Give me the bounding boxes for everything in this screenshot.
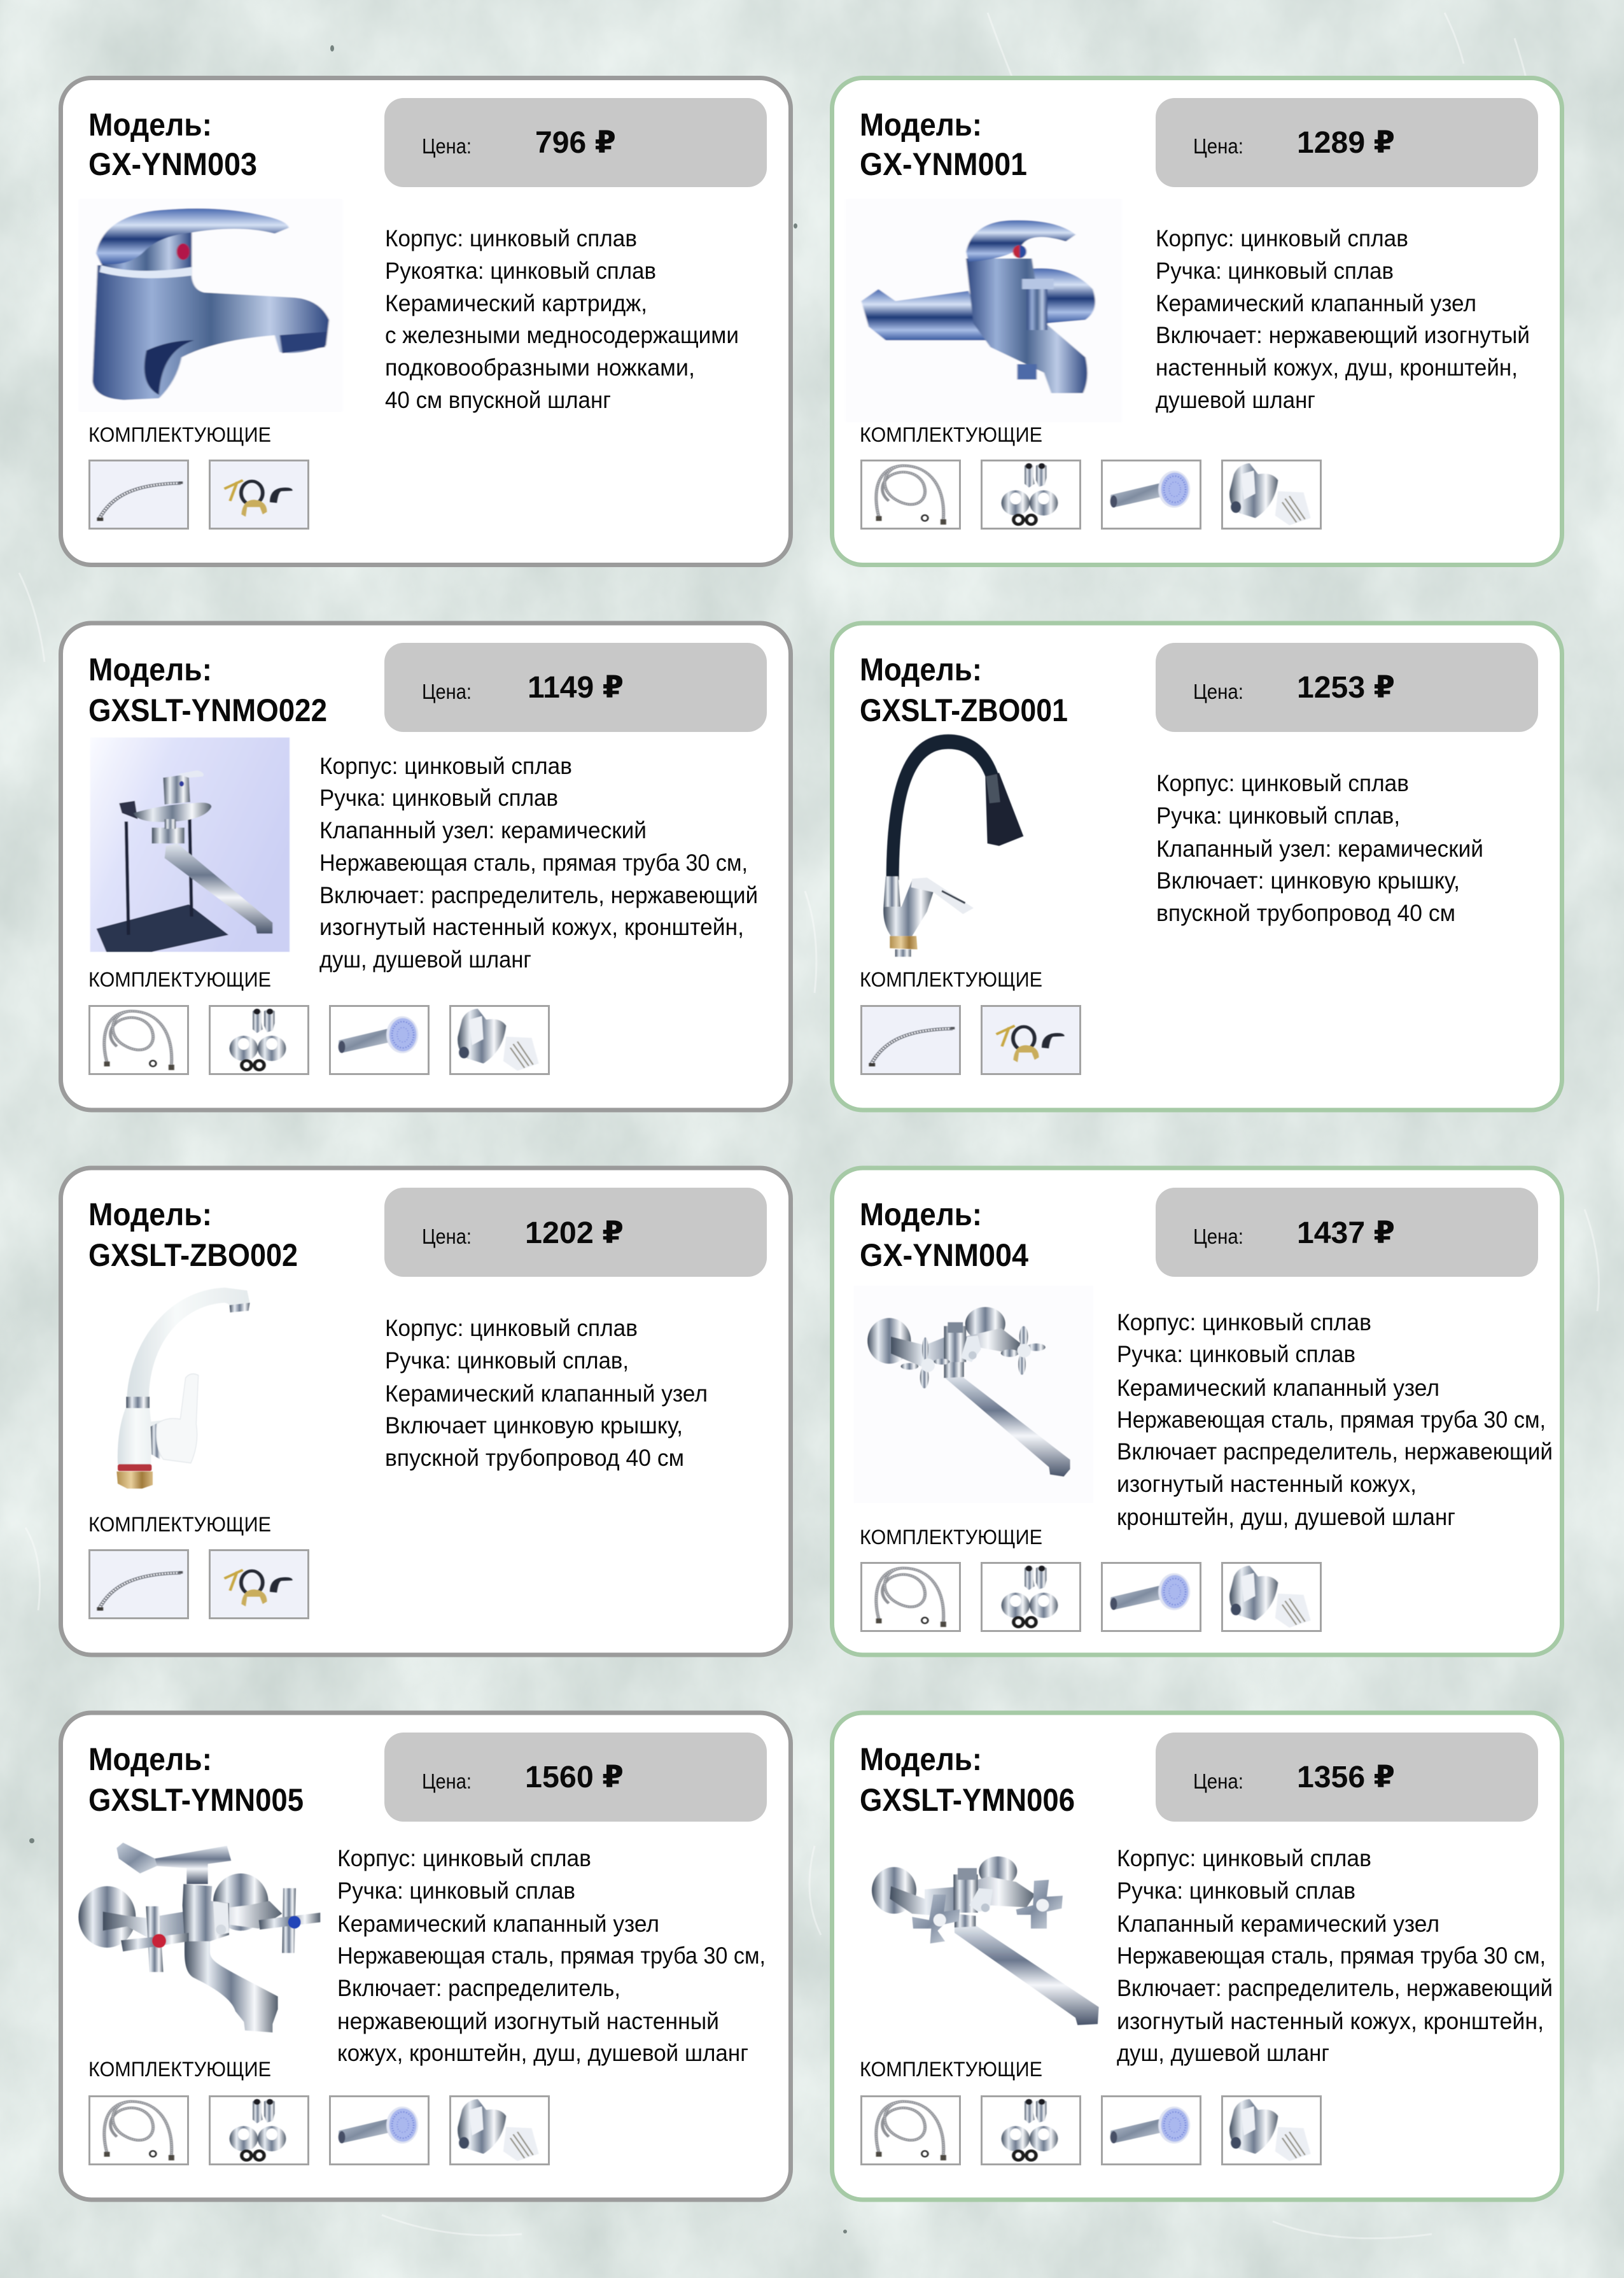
accessories heading: КОМПЛЕКТУЮЩИЕ [860, 423, 1042, 446]
price box: Цена: [1193, 1225, 1243, 1248]
spec text: Корпус: цинковый сплав [385, 1315, 638, 1341]
model title [860, 1741, 1075, 1818]
price box: 1202 ₽ [525, 1216, 624, 1250]
spec text: Корпус: цинковый сплав [1117, 1845, 1371, 1871]
spec text: изогнутый настенный кожух, кронштейн, [1117, 2008, 1544, 2034]
spec text: Ручка: цинковый сплав, [1156, 803, 1400, 829]
card: GXSLT-YNMO022 [61, 623, 790, 1110]
accessory: wall holder [451, 2097, 549, 2164]
model title [860, 1197, 1028, 1273]
spec text [385, 225, 739, 413]
accessory: flexible hose [89, 1550, 188, 1618]
model title: Модель: [88, 652, 212, 687]
price box [1156, 1733, 1538, 1822]
spec text: душевой шланг [1156, 387, 1315, 413]
model title: GXSLT-YNMO022 [88, 693, 327, 728]
price box: 1560 ₽ [525, 1761, 624, 1794]
model title: Модель: [860, 652, 982, 687]
price box: Цена: [1193, 134, 1243, 158]
price box [1156, 98, 1538, 187]
spec text: Керамический клапанный узел [385, 1381, 708, 1407]
model title [88, 1741, 304, 1818]
accessory: mounting parts [981, 1006, 1081, 1074]
spec text [337, 1845, 766, 2066]
spec text: Корпус: цинковый сплав [385, 225, 637, 251]
accessory: shower hose [862, 461, 960, 528]
spec text: кронштейн, душ, душевой шланг [1117, 1504, 1455, 1530]
accessory: shower head [1102, 1563, 1200, 1631]
model title: GXSLT-ZBO001 [860, 693, 1068, 728]
accessory: mounting parts [210, 1550, 308, 1618]
price box: 1149 ₽ [528, 671, 624, 705]
price box: Цена: [1193, 1769, 1243, 1793]
price box: Цена: [422, 134, 472, 158]
accessories heading: КОМПЛЕКТУЮЩИЕ [88, 2058, 271, 2081]
accessory: flexible hose [862, 1006, 960, 1074]
model title: Модель: [88, 107, 212, 143]
spec text: Нержавеющая сталь, прямая труба 30 см, [1117, 1943, 1546, 1969]
price box [384, 643, 767, 732]
spec text: Керамический клапанный узел [1156, 290, 1476, 316]
card: GX-YNM004 [832, 1168, 1562, 1655]
model title: GXSLT-YMN006 [860, 1782, 1075, 1818]
spec text: Ручка: цинковый сплав [1117, 1341, 1355, 1367]
accessories heading: КОМПЛЕКТУЮЩИЕ [860, 1526, 1042, 1549]
product image: black gooseneck faucet [883, 742, 1023, 957]
spec text [1156, 225, 1530, 413]
accessory: shower head [330, 2097, 429, 2164]
accessory: fittings [210, 1006, 308, 1074]
spec text: Ручка: цинковый сплав [319, 785, 558, 811]
model title: Модель: [860, 1741, 982, 1777]
accessory: wall holder [451, 1006, 549, 1074]
price box: 796 ₽ [535, 126, 616, 160]
accessories heading: КОМПЛЕКТУЮЩИЕ [88, 423, 271, 446]
spec text: кожух, кронштейн, душ, душевой шланг [337, 2040, 748, 2066]
spec text: нержавеющий изогнутый настенный [337, 2008, 719, 2034]
spec text: Нержавеющая сталь, прямая труба 30 см, [319, 850, 748, 876]
spec text [1117, 1845, 1553, 2066]
model title: Модель: [88, 1197, 212, 1232]
product image: basin faucet [78, 199, 342, 412]
card frame [61, 1713, 790, 2200]
card frame [832, 623, 1562, 1110]
spec text: Включает: распределитель, нержавеющий [319, 882, 758, 908]
spec text: Корпус: цинковый сплав [1156, 770, 1409, 796]
spec text: впускной трубопровод 40 см [1156, 900, 1455, 926]
accessory: mounting parts [210, 461, 308, 528]
model title [860, 652, 1068, 728]
price box: 1289 ₽ [1297, 126, 1395, 160]
model title: GX-YNM003 [88, 146, 257, 182]
price box: Цена: [422, 680, 472, 703]
spec text: Корпус: цинковый сплав [1117, 1309, 1371, 1335]
accessory: wall holder [1222, 2097, 1321, 2164]
spec text [1117, 1309, 1553, 1530]
card frame [832, 78, 1562, 565]
spec text: Включает цинковую крышку, [385, 1412, 683, 1438]
spec text: впускной трубопровод 40 см [385, 1445, 684, 1471]
spec text: Ручка: цинковый сплав, [385, 1347, 629, 1374]
spec text: Ручка: цинковый сплав [337, 1878, 575, 1904]
spec text [1156, 770, 1483, 926]
card: GX-YNM003 [61, 78, 790, 565]
card frame [61, 1168, 790, 1655]
spec text: настенный кожух, душ, кронштейн, [1156, 355, 1518, 381]
spec text: Нержавеющая сталь, прямая труба 30 см, [337, 1943, 766, 1969]
price box: Цена: [422, 1225, 472, 1248]
spec text [319, 753, 758, 973]
accessory: shower hose [89, 2097, 188, 2164]
model title: Модель: [860, 1197, 982, 1232]
model title: GXSLT-YMN005 [88, 1782, 304, 1818]
card frame [61, 623, 790, 1110]
card: GXSLT-ZBO001 [832, 623, 1562, 1110]
model title [88, 1197, 298, 1273]
accessory: flexible hose [89, 461, 188, 528]
spec text: Включает: распределитель, [337, 1975, 620, 2001]
price box: 1437 ₽ [1297, 1216, 1395, 1250]
accessory: wall holder [1222, 1563, 1321, 1631]
spec text: Керамический клапанный узел [1117, 1375, 1439, 1401]
model title [88, 107, 257, 182]
spec text: 40 см впускной шланг [385, 387, 611, 413]
accessories heading: КОМПЛЕКТУЮЩИЕ [88, 968, 271, 991]
card: GXSLT-YMN006 [832, 1713, 1562, 2200]
spec text [385, 1315, 708, 1471]
spec text: Ручка: цинковый сплав [1117, 1878, 1355, 1904]
product image: twin cross-handle mixer [854, 1286, 1093, 1503]
accessories heading: КОМПЛЕКТУЮЩИЕ [860, 968, 1042, 991]
model title: Модель: [860, 107, 982, 143]
spec text: Корпус: цинковый сплав [319, 753, 572, 779]
product image: long spout twin handle mixer [872, 1857, 1099, 2025]
price box: Цена: [422, 1769, 472, 1793]
model title [860, 107, 1027, 182]
accessory: fittings [981, 2097, 1081, 2164]
model title: GX-YNM004 [860, 1237, 1028, 1273]
accessory: wall holder [1222, 461, 1321, 528]
price box: 1253 ₽ [1297, 671, 1395, 705]
spec text: изогнутый настенный кожух, кронштейн, [319, 914, 744, 940]
spec text: с железными медносодержащими [385, 322, 739, 348]
price box [384, 1188, 767, 1277]
spec text: Ручка: цинковый сплав [1156, 258, 1394, 284]
spec text: Включает: цинковую крышку, [1156, 868, 1460, 894]
spec text: Включает распределитель, нержавеющий [1117, 1438, 1553, 1465]
spec text: Клапанный узел: керамический [319, 817, 647, 843]
card frame [61, 78, 790, 565]
price box [1156, 1188, 1538, 1277]
model title: GXSLT-ZBO002 [88, 1237, 298, 1273]
spec text: Включает: нержавеющий изогнутый [1156, 322, 1530, 348]
spec text: Клапанный керамический узел [1117, 1911, 1439, 1937]
spec text: Керамический клапанный узел [337, 1911, 659, 1937]
spec text: душ, душевой шланг [319, 946, 531, 973]
price box [384, 98, 767, 187]
price box [384, 1733, 767, 1822]
spec text: Корпус: цинковый сплав [337, 1845, 591, 1871]
accessories heading: КОМПЛЕКТУЮЩИЕ [860, 2058, 1042, 2081]
spec text: подковообразными ножками, [385, 355, 695, 381]
accessories heading: КОМПЛЕКТУЮЩИЕ [88, 1513, 271, 1536]
accessory: shower hose [89, 1006, 188, 1074]
spec text: Включает: распределитель, нержавеющий [1117, 1975, 1553, 2001]
spec text: Нержавеющая сталь, прямая труба 30 см, [1117, 1407, 1546, 1433]
spec text: Рукоятка: цинковый сплав [385, 258, 656, 284]
product image: bath mixer with shower arm [78, 1843, 320, 2032]
card frame [832, 1168, 1562, 1655]
price box [1156, 643, 1538, 732]
spec text: Керамический картридж, [385, 290, 647, 316]
card: GXSLT-ZBO002 [61, 1168, 790, 1655]
accessory: shower head [1102, 461, 1200, 528]
accessory: fittings [210, 2097, 308, 2164]
spec text: изогнутый настенный кожух, [1117, 1471, 1417, 1497]
product image: bath mixer [846, 199, 1122, 422]
accessory: shower hose [862, 2097, 960, 2164]
accessory: fittings [981, 461, 1081, 528]
spec text: Корпус: цинковый сплав [1156, 225, 1408, 251]
price box: Цена: [1193, 680, 1243, 703]
product image: long spout mixer on stand [90, 738, 290, 952]
accessory: shower hose [862, 1563, 960, 1631]
model title: Модель: [88, 1741, 212, 1777]
price box: 1356 ₽ [1297, 1761, 1395, 1794]
card frame [832, 1713, 1562, 2200]
model title: GX-YNM001 [860, 146, 1027, 182]
product image: white faucet [116, 1288, 250, 1489]
card: GX-YNM001 [832, 78, 1562, 565]
card: GXSLT-YMN005 [61, 1713, 790, 2200]
accessory: shower head [1102, 2097, 1200, 2164]
spec text: душ, душевой шланг [1117, 2040, 1329, 2066]
accessory: shower head [330, 1006, 429, 1074]
spec text: Клапанный узел: керамический [1156, 836, 1483, 862]
model title [88, 652, 327, 728]
accessory: fittings [981, 1563, 1081, 1631]
